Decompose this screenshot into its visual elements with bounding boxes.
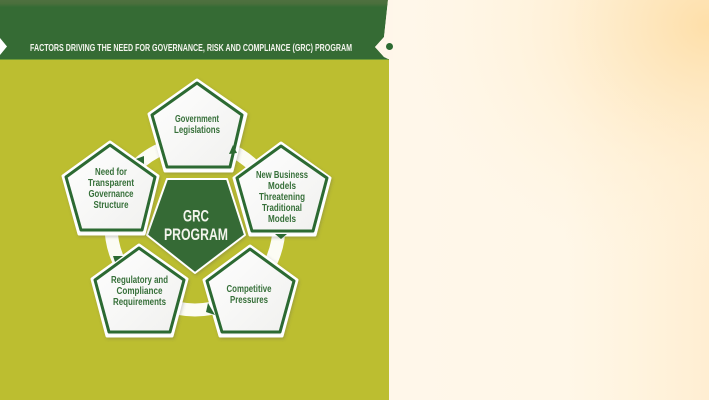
center pentagon: GRC Program: PROGRAM — [164, 225, 228, 244]
notch: right filler — [375, 0, 393, 59]
pentagon: Government Legislations: Legislations — [174, 124, 220, 136]
pentagon: Competitive Pressures: Pressures — [230, 294, 268, 306]
ring arrowheads — [113, 145, 287, 315]
diagram: GRC cycle — [63, 80, 330, 336]
pentagon: Regulatory and Compliance Requirements: Compliance — [116, 285, 163, 297]
white ring connecting the factors — [111, 142, 279, 310]
pentagon: New Business Models: New Business — [256, 169, 308, 181]
pentagon: Competitive Pressures — [204, 246, 297, 336]
pentagon: Need for Transparent Governance Structure: Governance — [88, 188, 134, 200]
cream background panel — [389, 0, 709, 400]
notch: left — [0, 38, 7, 55]
center pentagon: GRC Program: GRC — [183, 206, 209, 226]
pentagon: New Business Models: Threatening — [259, 191, 305, 203]
pentagon: Regulatory and Compliance Requirements: Requirements — [113, 296, 166, 308]
pentagon: Government Legislations — [149, 80, 246, 171]
pentagon: New Business Models: Models — [268, 213, 296, 225]
pentagon: Regulatory and Compliance Requirements — [92, 245, 187, 336]
pentagon: Need for Transparent Governance Structure: Structure — [94, 199, 129, 211]
center pentagon: GRC Program — [147, 179, 245, 273]
pentagon: Need for Transparent Governance Structure — [63, 142, 158, 234]
header title: FACTORS DRIVING THE NEED FOR GOVERNANCE, RISK AND COMPLIANCE (GRC) PROGRAM — [30, 43, 352, 54]
pentagon: New Business Models: Traditional — [262, 202, 302, 214]
pentagon: New Business Models: Models — [268, 180, 296, 192]
pentagon: Government Legislations: Government — [175, 113, 219, 125]
pentagon: Need for Transparent Governance Structure: Need for — [95, 166, 127, 178]
header dot — [386, 43, 393, 50]
pentagon: Regulatory and Compliance Requirements: Regulatory and — [111, 274, 168, 286]
pentagon: Need for Transparent Governance Structure: Transparent — [88, 177, 134, 189]
pentagon: Competitive Pressures: Competitive — [226, 283, 272, 295]
olive green panel — [0, 60, 389, 400]
header banner — [0, 0, 393, 60]
pentagon: New Business Models — [234, 143, 330, 235]
